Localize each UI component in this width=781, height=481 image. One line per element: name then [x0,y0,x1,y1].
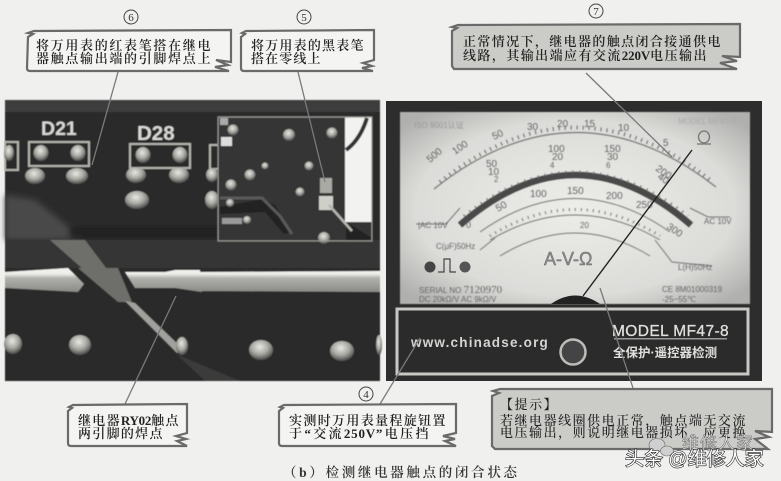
scale numbers: 200 [606,191,623,202]
callout: normal state: 线路，其输出端应有交流220V电压输出 [463,48,708,64]
face label: AC 10V left: |AC 10V [418,221,448,230]
face label: capacitance: C(μF)50Hz [436,242,475,251]
face label: serial: SERIAL NO 7120970 [419,284,503,296]
callout: hint [492,389,772,449]
relay pads [5,142,220,170]
plate knob [560,340,586,364]
face label: temperature: -25~55℃ [662,295,696,304]
step number 6 [124,10,138,24]
scale numbers: 2 [494,175,499,184]
step number 4 [359,387,373,401]
scale numbers: 50 [494,199,510,215]
scale numbers [425,119,685,240]
model plate [397,309,748,374]
callout: red probe [27,30,231,71]
icon: wechat watermark [649,438,674,456]
callout: range switch: 于“交流250V”电压挡 [289,426,430,441]
needle [583,150,692,296]
scale numbers: 50 [491,128,506,143]
icon: adjust knobs [424,259,470,272]
plate model: MODEL MF47-8 [612,323,729,340]
scale numbers: 20 [580,221,589,230]
callout: normal state: 正常情况下，继电器的触点闭合接通供电 [463,34,722,50]
face label: ISO: ISO 9001认证 [414,120,464,130]
icon: certification mark [697,131,711,144]
scale numbers: 100 [548,144,565,155]
scale numbers: 100 [450,139,471,157]
panel: photo inset [218,116,372,244]
panel: circuit board photo: D28 [137,122,175,145]
callout: hint: 电压输出，则说明继电器损坏，应更换 [500,425,747,441]
needle pivot [551,296,600,304]
callout: red probe: 器触点输出端的引脚焊点上 [36,51,212,66]
callout: relay solder joints: 两引脚的焊点 [78,426,164,441]
callout: black probe: 搭在零线上 [251,51,322,66]
scale numbers: 300 [664,221,685,240]
callout: hint: 若继电器线圈供电正常，触点端无交流 [500,413,747,429]
step number 4: 4 [363,389,369,401]
scale numbers: 150 [604,144,621,155]
callout: red probe: 将万用表的红表笔搭在继电 [36,38,212,53]
scale numbers: 50 [486,159,498,170]
callout: hint: 【提示】 [500,397,558,412]
scale numbers: 15 [584,119,596,130]
scale numbers: 250 [636,200,653,211]
callout: range switch: 实测时万用表量程旋钮置 [289,413,447,428]
plate rule [614,338,727,340]
figure caption: （b）检测继电器触点的闭合状态 [283,464,518,480]
step number 5 [297,10,311,24]
scale arcs [416,127,730,266]
face label: inductance: L(H)50Hz [678,263,712,272]
step number 5: 5 [301,12,307,24]
solder band [5,268,380,292]
callout: black probe: 将万用表的黑表笔 [251,38,365,53]
scale numbers: 40 [655,171,671,187]
callout: relay solder joints: 继电器RY02触点 [78,413,180,428]
plate url: www.chinadse.org [410,335,549,350]
panel: multimeter [386,101,762,381]
scale numbers: 20 [552,152,564,163]
panel: circuit board photo [4,100,382,381]
scale numbers: 10 [488,167,500,178]
scale numbers: 200 [653,163,674,182]
watermark: faint name: 维修人家 [682,434,754,453]
face label: certificate: CE 8M01000319 [662,285,723,294]
face label: AC 10V right: AC 10V [704,217,732,226]
meter face [400,112,750,304]
callout: normal state [452,24,740,69]
scale numbers: 30 [607,152,619,163]
scale numbers: 5 [663,138,669,149]
scale numbers: 150 [567,186,584,197]
scale numbers: 500 [425,146,445,165]
watermark: toutiao: 头条 @维修人家 [625,448,764,470]
callout: black probe [241,30,374,71]
scale numbers: 100 [530,189,547,200]
A-V-Ω label: A-V-Ω [544,249,592,269]
face label: sensitivity: DC 20kΩ/V AC 9kΩ/V [419,295,497,304]
callout: range switch [279,404,456,446]
leader lines [92,72,672,404]
scale numbers: 20 [557,119,569,130]
scale numbers: 10 [618,123,630,134]
step number 6: 6 [128,12,134,24]
step number 7 [589,4,603,18]
scale numbers: 30 [527,122,539,133]
plate subtitle: 全保护·遥控器检测 [613,345,717,360]
scale numbers: 4 [550,161,555,170]
scale numbers: 6 [606,161,611,170]
callout: relay solder joints [68,404,187,446]
heading labels D21 D28: D21 [41,118,77,140]
face label: model: MODEL MF47-8 [678,117,736,126]
scale numbers: 0 [466,220,471,230]
step number 7: 7 [593,6,599,18]
